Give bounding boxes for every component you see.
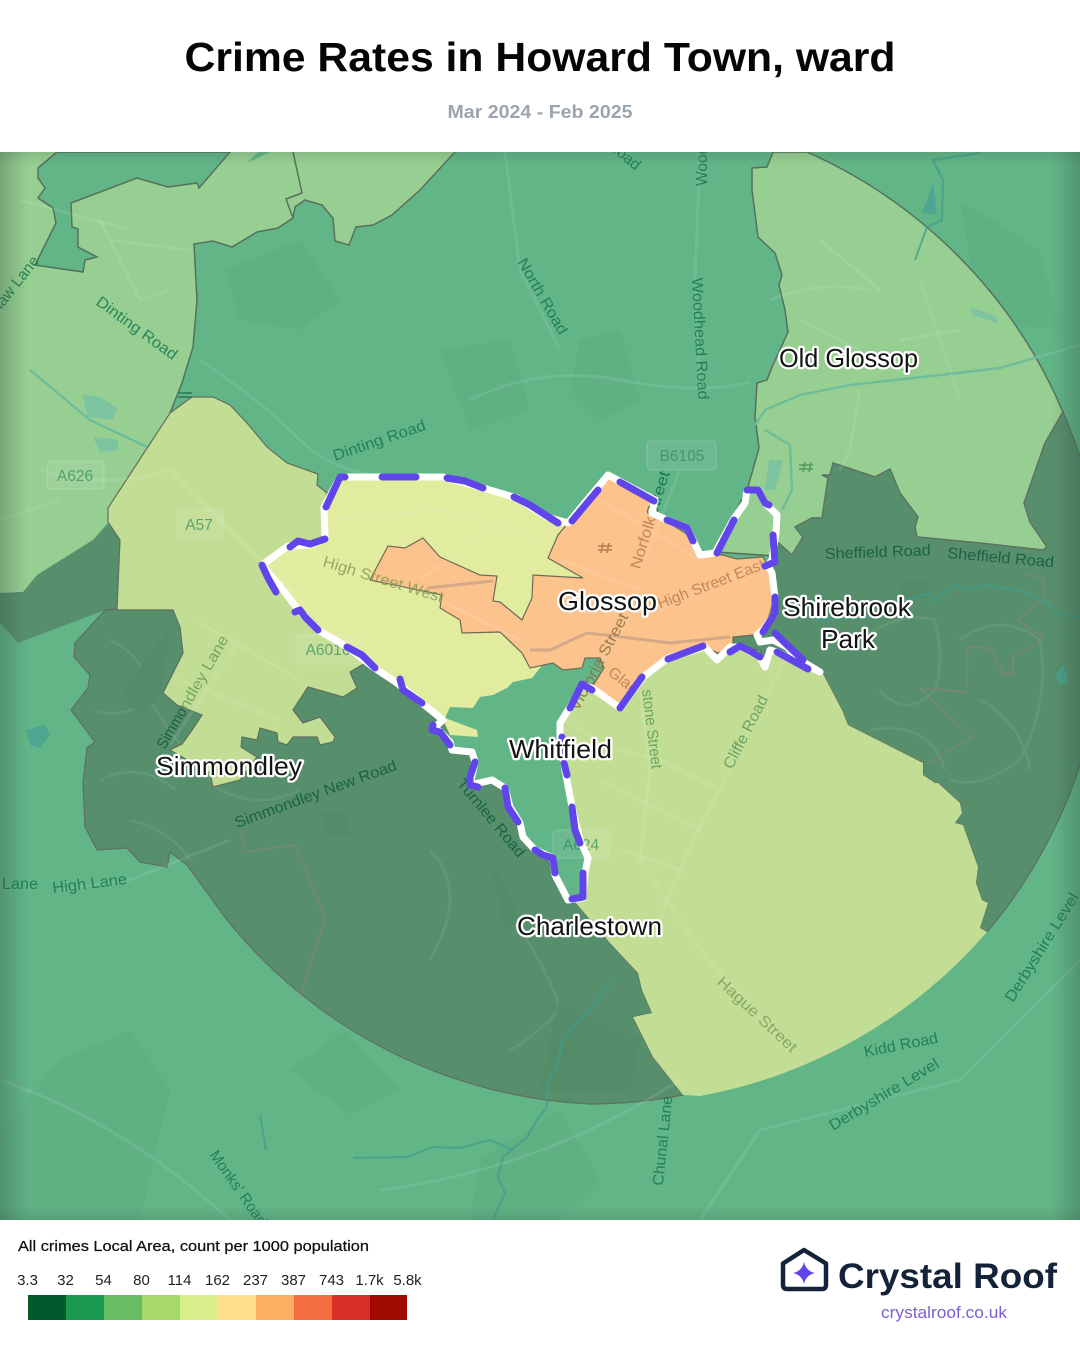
road label: Victoria Street: Victoria Street [567,610,633,714]
region: dark green east [733,412,1080,932]
woodland patches on base [0,200,1060,1220]
region: Howard Town pale yellow-green [262,477,600,737]
shield: B6105: B6105 [660,448,704,465]
place: Glossop: Glossop [558,586,657,616]
road label: High Lane: High Lane [51,871,128,897]
footpath lines [240,575,1045,998]
road label: Woodhead Road: Woodhead Road [688,277,711,400]
place: Charlestown: Charlestown [517,911,662,941]
region: central Glossop orange [370,475,777,708]
region: Old Glossop light green [716,152,1063,556]
lighter streams on light green [30,345,1080,510]
legend values: 80 [133,1272,150,1289]
subtitle: date range: Mar 2024 - Feb 2025 [448,102,632,122]
road label: North Road: North Road [514,256,571,338]
shield: B6105 [647,441,716,470]
dark woodland patches [133,666,562,1014]
shield: A624 [553,830,610,858]
region: dark green south [71,600,683,1104]
road label: Simmo part: Simmo [154,705,191,752]
region: Simmondley yellow-green [108,397,367,787]
legend: colour scale [17,1272,422,1320]
legend values: 387 [281,1272,306,1289]
road label: stone Street: stone Street [638,688,665,771]
legend values [17,1272,422,1289]
road label: High Street West: High Street West [321,554,446,607]
map base: mid-green area [0,152,1080,1220]
legend values: 743 [319,1272,344,1289]
road label: Hague Street: Hague Street [713,973,801,1057]
road label: Sheffield Road 1: Sheffield Road [825,542,931,563]
road label: Derbyshire Level east: Derbyshire Level [1002,890,1080,1005]
icon: railway station Old Glossop [799,462,813,472]
icon: house with star [783,1250,826,1289]
shield: A626 [47,461,104,489]
road network [0,152,1080,1220]
lakes [26,183,1068,748]
road label: Turnlee Road: Turnlee Road [453,776,528,861]
road label: Dinting Road west: Dinting Road [93,293,180,364]
shield: A57 [177,510,223,538]
icon: railway station central [598,543,612,553]
place: Old Glossop: Old Glossop [779,343,918,373]
legend values: 237 [243,1272,268,1289]
logo wordmark: Crystal Roof [838,1257,1057,1296]
shield: A624: A624 [563,837,599,854]
Howard Town ward boundary [262,475,820,900]
road label: Kidd Road: Kidd Road [863,1030,939,1061]
road number shields [47,441,716,858]
ward outline purple dashes [262,477,808,899]
legend values: 114 [168,1272,191,1289]
map vignette [0,152,1080,1220]
shield: A6016 [296,635,360,664]
road label: road top: Road [604,137,644,174]
residential streets in dark areas [95,618,1042,1050]
region: left light green [0,152,455,593]
legend values: 162 [205,1272,230,1289]
road label: Glad: Glad [605,664,642,698]
region: dark green left [0,524,120,643]
shield: A626: A626 [57,468,93,485]
legend values: 3.3 [17,1272,38,1289]
ponds on light green [83,307,997,490]
region: south-east yellow-green [560,647,988,1096]
region: top mid green notch [35,152,230,272]
place labels [156,343,918,941]
road label: Cliffe Road: Cliffe Road [720,693,772,772]
road label: ndley Lane part: ndley Lane [176,633,232,713]
title: Crime Rates in Howard Town, ward [184,34,895,80]
logo: Crystal Roof [783,1250,1057,1322]
legend values: 5.8k [393,1272,422,1289]
road label: Lane: Lane [2,876,38,893]
legend title: All crimes Local Area, count per 1000 population [18,1238,369,1255]
icon: railway station west [178,393,192,397]
road label: Norfolk: Norfolk [628,514,660,571]
legend values: 1.7k [355,1272,384,1289]
legend swatches [28,1295,407,1320]
road label: High Street East: High Street East [655,556,768,613]
road label: Simmondley New Road: Simmondley New Road [233,757,399,832]
region: small mid green wedge [247,152,270,163]
legend values: 32 [57,1272,74,1289]
shield: A6016: A6016 [306,642,350,659]
road label: Woodhead top: Wood [694,146,711,186]
road label: Dinting Road east: Dinting Road [331,417,428,465]
region: Whitfield mid green [440,727,572,896]
ward outline white [262,475,820,900]
place: Shirebrook: Shirebrook [783,592,912,622]
shield: A57: A57 [185,517,213,534]
water and rivers [260,153,1080,1220]
legend values: 54 [95,1272,112,1289]
region boundaries on the north side [170,152,455,413]
road label: Monks Road: Monks' Road [206,1148,270,1229]
website link text: crystalroof.co.uk [881,1304,1008,1322]
railway streak through town centre [427,581,730,650]
road label: Derbyshire Level south: Derbyshire Level [826,1055,942,1134]
place: Park: Park [821,624,876,654]
road label: Sheffield Road 2: Sheffield Road [947,545,1055,571]
place: Whitfield: Whitfield [509,734,612,764]
place: Simmondley: Simmondley [156,751,302,781]
road label: Street north: Street [644,469,674,519]
road label: Chunal Lane: Chunal Lane [650,1095,676,1186]
